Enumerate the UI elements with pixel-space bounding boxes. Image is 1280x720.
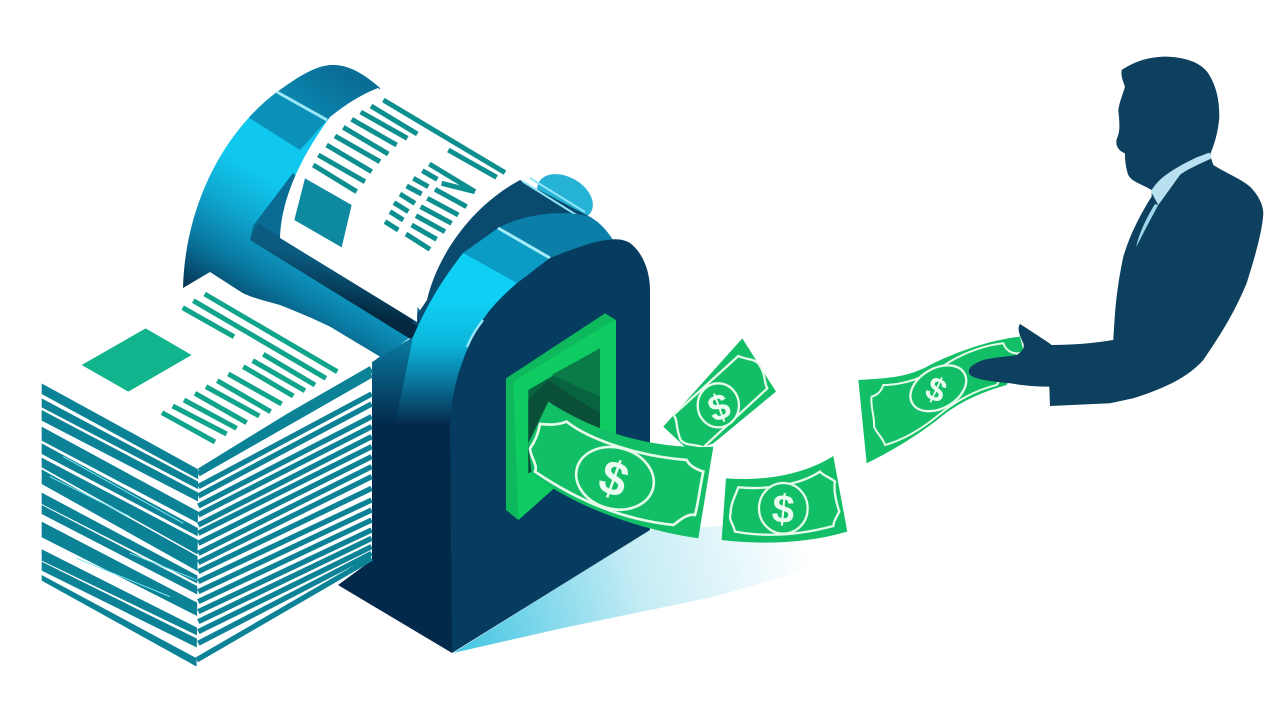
bill: upper flying: $ [702,385,736,430]
stack: right side [197,369,372,667]
paper picture block [294,178,352,247]
machine: rear arch [183,50,420,360]
businessman silhouette [969,57,1263,406]
shirt collar [1151,153,1212,205]
dollar bills [528,338,847,543]
bill: lower flying: $ [770,487,796,533]
bill: upper flying [663,338,776,452]
bill: lower flying [722,456,847,543]
bill: emerging from slot [528,402,713,538]
machine: rear right arch and roller knob [412,165,601,332]
lapel highlight [1136,204,1158,247]
stack: top sheet [42,273,380,468]
paper sheet on roller [280,88,507,322]
machine: front right arch band [395,213,613,425]
bill: emerging from slot: $ [592,449,636,509]
stack: top sheet text lines [162,294,337,442]
light beam under machine [453,520,840,653]
stack: top sheet picture block [82,328,192,392]
machine: side wall [338,337,470,653]
paper text lines [313,100,505,249]
bill: in hand: $ [920,370,952,411]
bill held by businessman and businessman silhouette [858,57,1263,463]
stack: left side [42,383,198,667]
machine: green money slot [506,313,616,520]
machine: front face [450,239,650,653]
bill: in hand [858,337,1023,463]
paper stack [42,273,380,667]
